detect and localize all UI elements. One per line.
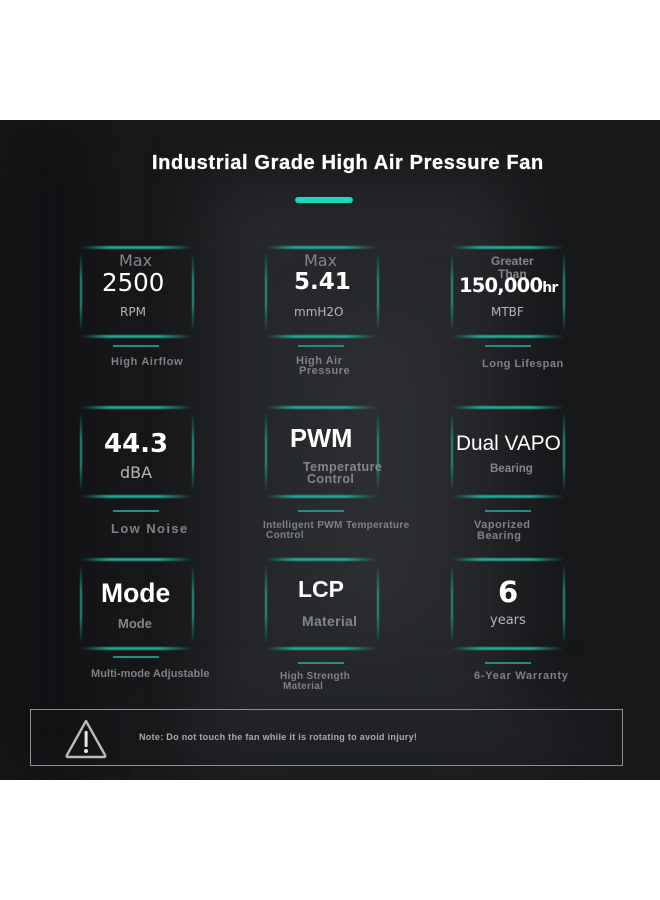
card: 44.3 dBA: [79, 405, 195, 499]
card: Mode: [79, 557, 195, 651]
divider: noise: [113, 510, 159, 512]
divider: pressure: [298, 345, 344, 347]
card text: Temperature Control: Control: [307, 472, 354, 486]
card: max 2500 RPM: [79, 245, 195, 339]
card unit: RPM: RPM: [120, 305, 146, 319]
card value: PWM: PWM: [290, 425, 352, 453]
caption: Low Noise: Low Noise: [111, 521, 189, 536]
panel: dark background: [0, 120, 660, 780]
card: PWM temperature control: [264, 405, 380, 499]
caption: High Air Pressure: Pressure: [299, 365, 350, 377]
card unit: MTBF: MTBF: [491, 305, 524, 319]
caption: Intelligent PWM Temperature Control: Intelligent PWM Temperature: [263, 520, 410, 531]
caption: High Air Pressure: [296, 355, 350, 377]
card value: LCP: LCP: [298, 576, 344, 602]
caption: Vaporized Bearing: [474, 519, 530, 542]
card value: 5.41: 5.41: [294, 269, 351, 295]
card: Dual VAPO bearing: [450, 405, 566, 499]
caption: Vaporized Bearing: Bearing: [477, 530, 521, 542]
card value: 6: 6: [498, 575, 518, 609]
card text: Greater Than: Greater: [491, 254, 534, 268]
caption: High Strength Material: [280, 671, 350, 692]
divider: warranty: [485, 662, 531, 664]
divider: PWM: [298, 510, 344, 512]
divider: LCP: [298, 662, 344, 664]
card text: Temperature Control: Temperature: [303, 460, 382, 474]
card: 150,000hr MTBF: [450, 245, 566, 339]
card value: 2500: 2500: [102, 268, 164, 297]
title: Industrial Grade High Air Pressure Fan: [152, 152, 544, 174]
caption: Long Lifespan: Long Lifespan: [482, 358, 564, 370]
card text: Max: Max: [119, 251, 152, 270]
caption: Multi-mode Adjustable: Multi-mode Adjustable: [91, 668, 210, 680]
caption: Intelligent PWM Temperature Control: [263, 520, 410, 541]
card: max 5.41 mmH2O: [264, 245, 380, 339]
card text: Greater Than: [491, 254, 534, 281]
card text: Temperature Control: [303, 460, 382, 486]
caption: Intelligent PWM Temperature Control: Control: [266, 530, 304, 541]
card: 6 years: [450, 557, 566, 651]
card unit: dBA: dBA: [120, 463, 152, 482]
caption: 6-Year Warranty: 6-Year Warranty: [474, 670, 569, 682]
card text: Greater Than: Than: [498, 267, 527, 281]
caption: High Airflow: High Airflow: [111, 356, 183, 368]
caption: High Air Pressure: High Air: [296, 355, 342, 367]
card value: Dual VAPO: Dual VAPO: [456, 432, 561, 455]
caption: High Strength Material: High Strength: [280, 671, 350, 682]
warning box: [30, 709, 623, 766]
divider: airflow: [113, 345, 159, 347]
caption: Vaporized Bearing: Vaporized: [474, 519, 530, 531]
card: LCP material: [264, 557, 380, 651]
card text: Mode: Mode: [118, 616, 152, 631]
card text: Material: Material: [302, 613, 357, 629]
card unit: mmH2O: mmH2O: [294, 305, 343, 319]
divider: mode: [113, 656, 159, 658]
card value: 150,000hr: 150,000hr: [459, 274, 558, 297]
warning note text: Note: Do not touch the fan while it is rotating to avoid injury!: [139, 732, 417, 742]
title accent bar: [295, 197, 353, 203]
card value: 44.3: 44.3: [104, 429, 168, 459]
divider: lifespan: [485, 345, 531, 347]
card text: Bearing: Bearing: [490, 463, 533, 475]
icon: warning triangle: [66, 720, 106, 758]
divider: VAPO: [485, 510, 531, 512]
caption: High Strength Material: Material: [283, 681, 323, 692]
card text: Max: Max: [304, 251, 337, 270]
card unit: years: years: [490, 613, 526, 628]
card value: Mode: Mode: [101, 578, 170, 608]
